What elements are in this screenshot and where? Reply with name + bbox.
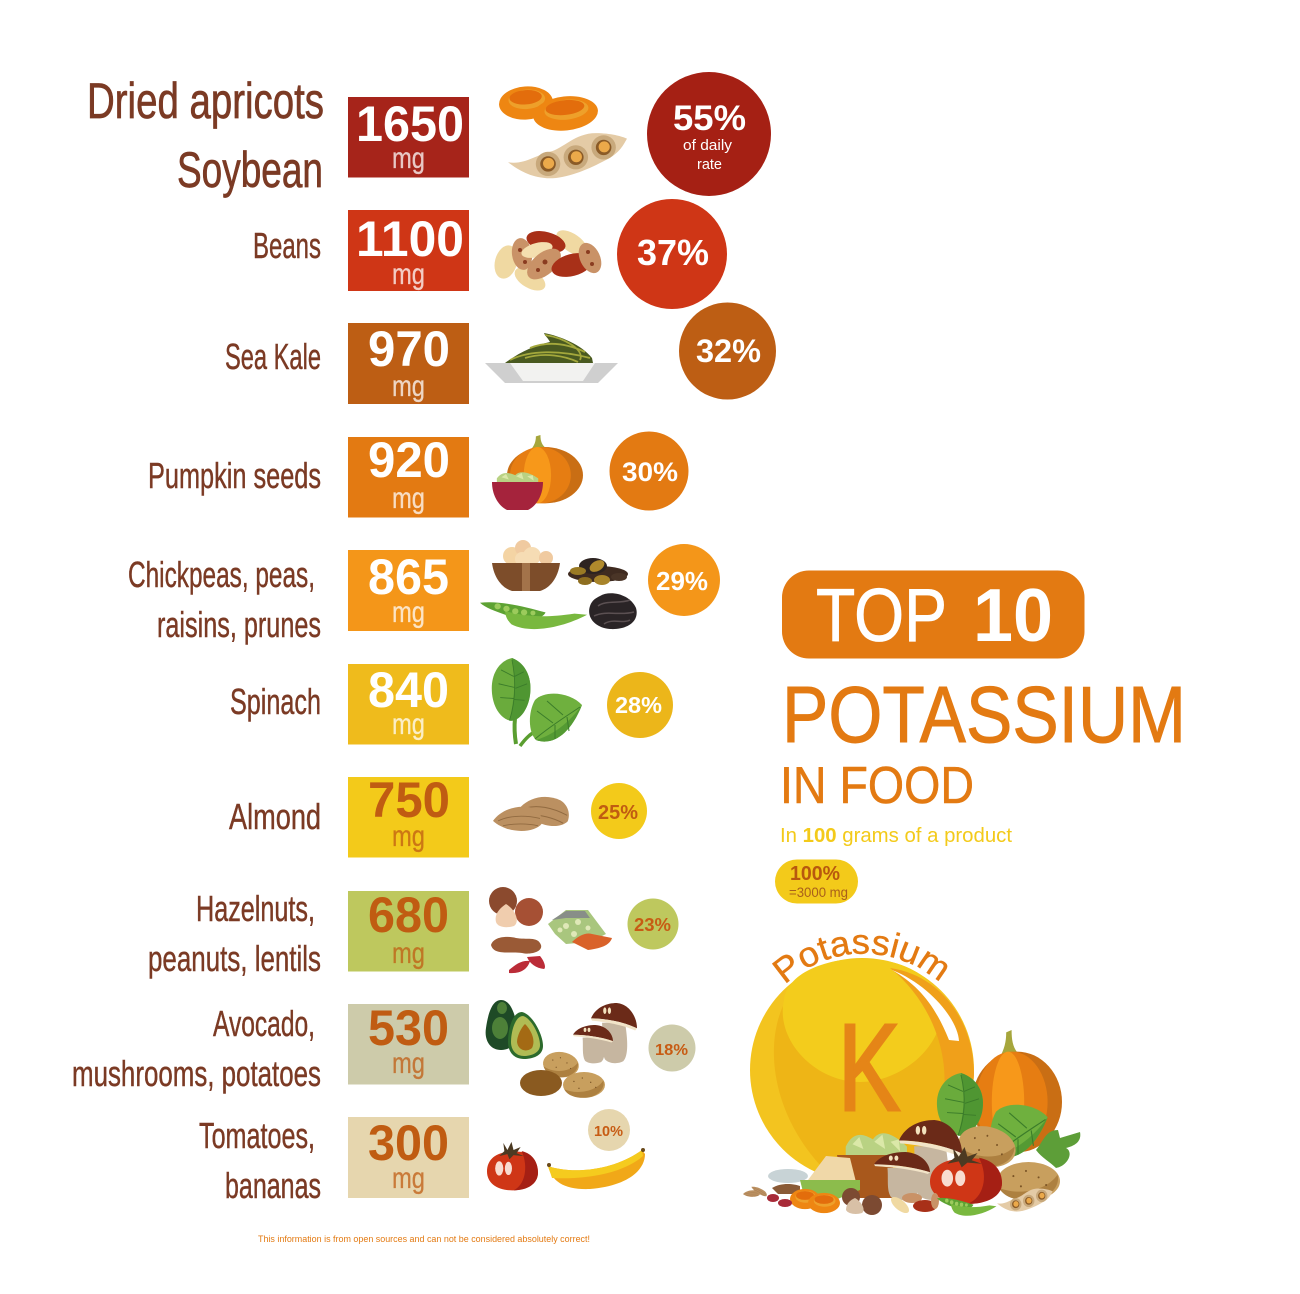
value box: 1100 mg: 1100 bbox=[356, 211, 464, 267]
food: spinach leaves bbox=[937, 1073, 1080, 1168]
value box: 970 mg bbox=[348, 321, 469, 404]
label: avocado, mushrooms, potatoes bbox=[72, 1003, 321, 1094]
food: chickpea bowl bbox=[768, 1156, 860, 1200]
circle: 10%: 10% bbox=[594, 1123, 623, 1140]
arc text: potassium bbox=[772, 932, 948, 984]
circle: 23% bbox=[628, 898, 678, 950]
value box: 530 mg bbox=[348, 1000, 469, 1084]
badge: top 10: 10 bbox=[973, 573, 1053, 657]
value box: 840 mg: 840 bbox=[368, 662, 449, 718]
icon: beans bbox=[491, 225, 606, 295]
food: pumpkin bbox=[972, 1030, 1062, 1152]
icon: mushrooms bbox=[573, 1003, 637, 1063]
row: pumpkin seeds bbox=[148, 432, 688, 518]
value box: 840 mg: mg bbox=[392, 708, 425, 741]
label: almond: Almond bbox=[229, 796, 321, 837]
value box: 865 mg: mg bbox=[392, 596, 425, 629]
label: chickpeas, peas, raisins, prunes bbox=[128, 554, 321, 645]
subheading: in 100 grams: In 100 grams of a product bbox=[780, 824, 1012, 847]
value box: 1650 mg: 1650 bbox=[356, 96, 464, 152]
label: hazelnuts, peanuts, lentils bbox=[148, 888, 321, 979]
icon: banana bbox=[547, 1148, 645, 1189]
label: spinach: Spinach bbox=[230, 681, 321, 722]
label: hazelnuts, peanuts, lentils: peanuts, lentils bbox=[148, 938, 321, 979]
icon: soybean pod bbox=[508, 133, 627, 178]
badge: 100% equals 3000 mg bbox=[775, 860, 858, 904]
value box: 300 mg: 300 bbox=[368, 1115, 449, 1171]
circle: 25% bbox=[591, 783, 647, 839]
title block bbox=[775, 570, 1186, 904]
label: pumpkin seeds: Pumpkin seeds bbox=[148, 455, 321, 496]
circle: 23%: 23% bbox=[634, 915, 671, 935]
icon: peanuts bbox=[491, 937, 545, 973]
row: avocado, mushrooms, potatoes bbox=[72, 1000, 696, 1098]
badge: top 10: TOP bbox=[816, 573, 947, 657]
circle: 10% bbox=[588, 1109, 630, 1151]
food: mushrooms bbox=[874, 1120, 962, 1200]
value box: 1650 mg bbox=[348, 96, 469, 178]
icon: sea kale on plate bbox=[485, 333, 618, 383]
label: tomatoes, bananas: bananas bbox=[225, 1165, 321, 1206]
food: hazelnuts bbox=[842, 1188, 882, 1215]
icon: raisins bbox=[568, 558, 628, 585]
value box: 1100 mg: mg bbox=[392, 258, 425, 291]
value box: 920 mg bbox=[348, 432, 469, 518]
icon: hazelnuts bbox=[489, 887, 543, 927]
label: avocado, mushrooms, potatoes: mushrooms, potatoes bbox=[72, 1053, 321, 1094]
circle: 30% bbox=[610, 432, 688, 510]
icon: pumpkin bbox=[507, 435, 583, 503]
value box: 300 mg: mg bbox=[392, 1162, 425, 1195]
value box: 840 mg bbox=[348, 662, 469, 744]
circle: 55% of daily rate: rate bbox=[697, 157, 722, 173]
label: chickpeas, peas, raisins, prunes: raisins, prunes bbox=[157, 604, 321, 645]
circle: 55% of daily rate: 55% bbox=[673, 99, 746, 138]
food: almonds and red beans bbox=[743, 1184, 792, 1207]
circle: 18%: 18% bbox=[655, 1042, 688, 1059]
value box: 750 mg bbox=[348, 772, 469, 858]
icon: lentils bbox=[548, 910, 612, 950]
food: tomato bbox=[930, 1147, 1002, 1204]
icon: almonds bbox=[493, 791, 572, 831]
illustration: potassium capsule with foods bbox=[743, 932, 1080, 1216]
icon: prune bbox=[589, 593, 637, 629]
circle: 32%: 32% bbox=[696, 333, 761, 369]
capsule bbox=[750, 958, 974, 1182]
row: dried apricots and soybean bbox=[87, 72, 771, 198]
value box: 970 mg: 970 bbox=[368, 321, 450, 377]
value box: 865 mg bbox=[348, 549, 469, 631]
label: dried apricots, soybean bbox=[87, 73, 324, 198]
label: avocado, mushrooms, potatoes: Avocado, bbox=[213, 1003, 315, 1044]
food: potatoes bbox=[954, 1120, 1060, 1200]
circle: 55% of daily rate bbox=[647, 72, 771, 196]
label: dried apricots, soybean: Dried apricots bbox=[87, 73, 324, 129]
badge: top 10 bbox=[782, 570, 1084, 658]
value box: 1100 mg bbox=[348, 210, 469, 291]
circle: 55% of daily rate: of daily bbox=[683, 138, 733, 154]
heading: potassium: POTASSIUM bbox=[782, 670, 1186, 759]
value box: 750 mg: mg bbox=[392, 820, 425, 853]
value box: 920 mg: mg bbox=[392, 482, 425, 515]
label: tomatoes, bananas bbox=[199, 1115, 321, 1206]
arc text: potassium: Potassium bbox=[772, 932, 948, 984]
circle: 18% bbox=[648, 1024, 696, 1072]
value box: 680 mg: mg bbox=[392, 937, 425, 970]
value box: 920 mg: 920 bbox=[368, 432, 450, 488]
label: sea kale: Sea Kale bbox=[225, 336, 321, 377]
icon: bowl of chickpeas bbox=[492, 540, 560, 591]
value box: 1650 mg: mg bbox=[392, 142, 425, 175]
value box: 530 mg: 530 bbox=[368, 1000, 449, 1056]
footnote: This information is from open sources and can not be considered absolutely correct! bbox=[258, 1234, 590, 1244]
icon: pea pods bbox=[480, 602, 587, 629]
value box: 865 mg: 865 bbox=[368, 549, 449, 605]
value box: 530 mg: mg bbox=[392, 1047, 425, 1080]
label: beans: Beans bbox=[253, 225, 321, 266]
circle: 28%: 28% bbox=[615, 692, 662, 718]
row: almond bbox=[229, 772, 647, 858]
label: chickpeas, peas, raisins, prunes: Chickpeas, peas, bbox=[128, 554, 315, 595]
food: bowl of seeds bbox=[837, 1133, 907, 1198]
label: dried apricots, soybean: Soybean bbox=[177, 142, 323, 198]
heading: in food: IN FOOD bbox=[780, 757, 974, 815]
row: tomatoes, bananas bbox=[199, 1109, 645, 1206]
icon: tomato bbox=[487, 1142, 538, 1190]
circle: 32% bbox=[679, 302, 776, 400]
circle: 29% bbox=[648, 544, 720, 616]
value box: 970 mg: mg bbox=[392, 370, 425, 403]
row: spinach bbox=[230, 658, 673, 746]
circle: 28% bbox=[607, 672, 673, 738]
letter K: K bbox=[838, 1000, 900, 1137]
circle: 30%: 30% bbox=[622, 457, 678, 487]
circle: 29%: 29% bbox=[656, 566, 708, 596]
row: hazelnuts, peanuts, lentils bbox=[148, 887, 678, 979]
circle: 37%: 37% bbox=[637, 232, 709, 273]
value box: 750 mg: 750 bbox=[368, 772, 450, 828]
value box: 680 mg: 680 bbox=[368, 887, 449, 943]
food: beans bbox=[888, 1193, 939, 1216]
icon: bowl of seeds bbox=[492, 472, 543, 510]
icon: potatoes bbox=[520, 1050, 605, 1098]
badge: 100% equals 3000 mg: =3000 mg bbox=[789, 885, 848, 900]
food: soybean pod bbox=[997, 1189, 1053, 1212]
label: tomatoes, bananas: Tomatoes, bbox=[199, 1115, 315, 1156]
badge: 100% equals 3000 mg: 100% bbox=[790, 863, 840, 885]
icon: avocado bbox=[486, 1000, 543, 1059]
icon: spinach bbox=[492, 658, 582, 746]
icon: apricots bbox=[498, 85, 600, 134]
value box: 300 mg bbox=[348, 1115, 469, 1198]
value box: 680 mg bbox=[348, 887, 469, 972]
circle: 37% bbox=[617, 199, 727, 309]
food: pea pod bbox=[937, 1198, 996, 1216]
food: apricots bbox=[790, 1189, 840, 1213]
label: hazelnuts, peanuts, lentils: Hazelnuts, bbox=[196, 888, 315, 929]
circle: 25%: 25% bbox=[598, 802, 638, 824]
row: chickpeas, peas, raisins, prunes bbox=[128, 540, 720, 645]
row: sea kale bbox=[225, 302, 776, 404]
row: beans bbox=[253, 199, 727, 309]
